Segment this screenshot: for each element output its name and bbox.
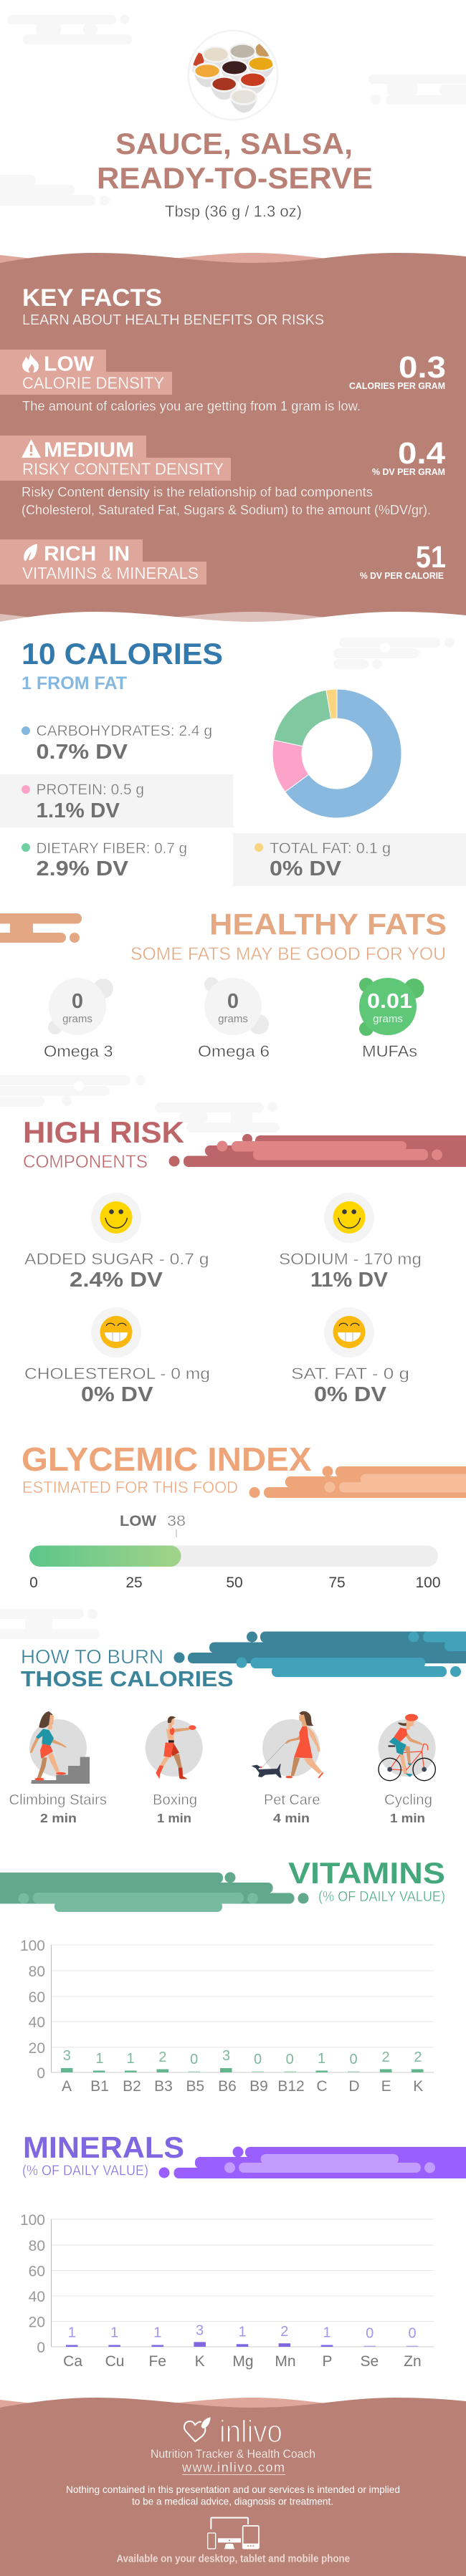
badge: mufas: MUFAs bbox=[362, 1042, 417, 1060]
title: SAUCE, SALSA, bbox=[115, 127, 353, 160]
bar chart: minerals: P bbox=[322, 2353, 333, 2370]
brush accent: orange bbox=[0, 913, 82, 943]
callout: rich in vitamins and minerals: VITAMINS & MINERALS bbox=[22, 564, 199, 582]
brush accent: purple bbox=[159, 2146, 466, 2178]
heading: those calories: THOSE CALORIES bbox=[21, 1666, 234, 1691]
bar chart: vitamins bbox=[20, 1938, 434, 2095]
callout: risky content density: MEDIUM bbox=[44, 438, 134, 461]
donut chart bbox=[272, 689, 401, 818]
brush accent: teal bbox=[173, 1632, 466, 1677]
badge: omega 3 bbox=[44, 978, 113, 1060]
text: risky content description: (Cholesterol, Saturated Fat, Sugars & Sodium) to the amount (%DV/gr). bbox=[22, 503, 431, 517]
panel: footer bbox=[0, 2398, 466, 2576]
callout: rich in vitamins and minerals: RICH IN bbox=[44, 543, 130, 566]
subheading: (% OF DAILY VALUE) bbox=[318, 1889, 445, 1905]
legend: carbohydrates: CARBOHYDRATES: 2.4 g bbox=[36, 723, 212, 739]
heading: how to burn: HOW TO BURN bbox=[21, 1645, 163, 1668]
bar chart: vitamins: 0 bbox=[190, 2052, 198, 2067]
legend: total fat bbox=[233, 833, 466, 886]
duration: 1 min bbox=[157, 1811, 191, 1825]
bar chart: vitamins: B9 bbox=[249, 2078, 268, 2095]
legend: dietary fiber bbox=[22, 840, 187, 880]
bar chart: vitamins: B1 bbox=[90, 2078, 109, 2095]
tagline: Nutrition Tracker & Health Coach bbox=[151, 2447, 315, 2461]
bar chart: minerals: Zn bbox=[404, 2353, 422, 2370]
subheading: ESTIMATED FOR THIS FOOD bbox=[22, 1478, 238, 1496]
bar chart: vitamins: 1 bbox=[95, 2051, 103, 2067]
stat: dv per calorie bbox=[360, 540, 446, 581]
icon: desktop, tablet and phone bbox=[208, 2518, 259, 2549]
bar chart: vitamins: D bbox=[348, 2078, 360, 2095]
item: saturated fat: SAT. FAT - 0 g bbox=[291, 1365, 409, 1383]
bar chart: minerals: 0 bbox=[408, 2325, 417, 2341]
icon: woman climbing stairs bbox=[29, 1711, 90, 1784]
legend: protein: PROTEIN: 0.5 g bbox=[36, 782, 144, 798]
callout: calorie density bbox=[0, 350, 172, 395]
subheading: components: COMPONENTS bbox=[23, 1152, 148, 1172]
bar chart: minerals: 40 bbox=[29, 2289, 45, 2305]
gauge scale: 50 bbox=[226, 1575, 243, 1591]
bar chart: vitamins: K bbox=[413, 2078, 423, 2095]
bar chart: vitamins: 3 bbox=[222, 2048, 230, 2064]
item: cholesterol bbox=[24, 1307, 210, 1406]
callout: calorie density: LOW bbox=[44, 352, 95, 375]
badge: omega 6: Omega 6 bbox=[198, 1042, 270, 1060]
badge: mufas: grams bbox=[373, 1013, 403, 1025]
activity: climbing stairs bbox=[9, 1711, 107, 1825]
bar chart: minerals: 80 bbox=[29, 2238, 45, 2254]
badge: omega 6: 0 bbox=[227, 990, 239, 1013]
label: Pet Care bbox=[264, 1792, 320, 1808]
bar chart: minerals: 1 bbox=[68, 2325, 76, 2341]
stat: dv per calorie: 51 bbox=[416, 540, 446, 575]
item: sodium: SODIUM - 170 mg bbox=[279, 1250, 422, 1268]
bar chart: vitamins: 1 bbox=[318, 2051, 325, 2067]
gauge scale: 100 bbox=[415, 1575, 441, 1591]
legend: protein bbox=[0, 774, 234, 827]
heading: calories: 10 CALORIES bbox=[22, 637, 223, 671]
item: added sugar: ADDED SUGAR - 0.7 g bbox=[24, 1250, 209, 1268]
availability note: Available on your desktop, tablet and mobile phone bbox=[116, 2553, 350, 2565]
item: cholesterol: CHOLESTEROL - 0 mg bbox=[24, 1365, 210, 1383]
badge: omega 3: 0 bbox=[72, 990, 83, 1013]
bar chart: vitamins: B12 bbox=[277, 2078, 305, 2095]
logo: inlivo heart and leaf bbox=[184, 2417, 211, 2441]
disclaimer: Nothing contained in this presentation and our services is intended or implied bbox=[66, 2484, 400, 2495]
panel: healthy fats bbox=[0, 907, 447, 1060]
item: saturated fat bbox=[291, 1307, 409, 1406]
callout: risky content density bbox=[0, 436, 231, 481]
bar chart: vitamins: 0 bbox=[254, 2052, 262, 2067]
icon: woman walking dog bbox=[252, 1711, 323, 1778]
badge: omega 3: Omega 3 bbox=[44, 1042, 113, 1060]
stat: dv per gram: % DV PER GRAM bbox=[372, 466, 445, 477]
item: sodium: 11% DV bbox=[310, 1269, 389, 1292]
heading: vitamins: VITAMINS bbox=[288, 1856, 445, 1890]
subheading: SOME FATS MAY BE GOOD FOR YOU bbox=[130, 944, 446, 964]
item: added sugar bbox=[24, 1193, 209, 1292]
activity: pet care bbox=[252, 1711, 323, 1825]
bar chart: minerals: 2 bbox=[280, 2324, 288, 2340]
bar chart: minerals: 0 bbox=[366, 2325, 374, 2341]
bar chart: vitamins: B3 bbox=[154, 2078, 173, 2095]
heading: minerals: MINERALS bbox=[23, 2130, 184, 2164]
bar chart: minerals: 3 bbox=[196, 2322, 204, 2338]
website link: www.inlivo.com bbox=[181, 2461, 285, 2475]
bar chart: vitamins: 0 bbox=[37, 2065, 45, 2082]
label: Climbing Stairs bbox=[9, 1792, 107, 1808]
label: Boxing bbox=[153, 1792, 197, 1808]
bar chart: vitamins: 20 bbox=[29, 2040, 45, 2057]
panel: burn calories bbox=[9, 1632, 466, 1825]
callout: rich in vitamins and minerals bbox=[0, 539, 206, 585]
title bbox=[97, 127, 373, 195]
heading: high risk: HIGH RISK bbox=[23, 1115, 184, 1149]
bar chart: minerals: 100 bbox=[20, 2212, 45, 2229]
bar chart: vitamins: 60 bbox=[29, 1989, 45, 2006]
bar chart: minerals: Cu bbox=[105, 2353, 124, 2370]
gauge bar bbox=[29, 1546, 438, 1567]
panel: key facts bbox=[0, 253, 466, 626]
item: saturated fat: 0% DV bbox=[314, 1383, 387, 1406]
heading: healthy fats: HEALTHY FATS bbox=[209, 907, 447, 941]
bar chart: vitamins: 100 bbox=[20, 1938, 45, 1954]
icon: woman cycling bbox=[379, 1714, 436, 1781]
icon: flame bbox=[22, 353, 39, 373]
brush accent: red bbox=[169, 1134, 466, 1167]
bar chart: vitamins: 3 bbox=[63, 2048, 71, 2064]
duration: 4 min bbox=[273, 1811, 310, 1825]
text: risky content description bbox=[22, 485, 431, 517]
bar chart: vitamins: B2 bbox=[123, 2078, 141, 2095]
bar chart: minerals: Ca bbox=[63, 2353, 82, 2370]
bar chart: vitamins: 80 bbox=[29, 1964, 45, 1980]
bar chart: minerals: 1 bbox=[110, 2325, 118, 2341]
bar chart: vitamins: 0 bbox=[349, 2052, 358, 2067]
label: Cycling bbox=[384, 1792, 432, 1808]
bar chart: minerals: Mn bbox=[275, 2353, 296, 2370]
gauge label: LOW bbox=[120, 1513, 156, 1529]
gauge scale bbox=[29, 1575, 441, 1591]
icon: warning triangle bbox=[22, 439, 41, 458]
gauge scale: 75 bbox=[328, 1575, 346, 1591]
stat: calories per gram: 0.3 bbox=[399, 350, 446, 385]
bar chart: minerals: K bbox=[195, 2353, 205, 2370]
disclaimer: to be a medical advice, diagnosis or treatment. bbox=[132, 2496, 333, 2507]
subheading: (% OF DAILY VALUE) bbox=[22, 2163, 148, 2179]
stat: dv per gram: 0.4 bbox=[398, 436, 445, 471]
heading: key facts: KEY FACTS bbox=[22, 284, 162, 312]
heading: glycemic index: GLYCEMIC INDEX bbox=[22, 1441, 312, 1478]
gauge scale: 0 bbox=[29, 1575, 38, 1591]
panel: high risk bbox=[23, 1115, 466, 1406]
badge: omega 6: grams bbox=[218, 1013, 248, 1025]
gauge label bbox=[120, 1513, 186, 1537]
bar chart: minerals: Se bbox=[360, 2353, 379, 2370]
duration: 1 min bbox=[390, 1811, 425, 1825]
panel: minerals bbox=[20, 2130, 466, 2370]
gauge scale: 25 bbox=[125, 1575, 143, 1591]
badge: omega 6 bbox=[198, 977, 270, 1060]
bar chart: vitamins: 2 bbox=[158, 2049, 166, 2065]
bar chart: minerals: 1 bbox=[238, 2325, 247, 2340]
stat: dv per gram bbox=[372, 436, 445, 477]
legend: protein: 1.1% DV bbox=[36, 799, 120, 822]
brush accent: orange bbox=[249, 1466, 466, 1498]
item: sodium bbox=[279, 1193, 422, 1292]
bar chart: minerals: 1 bbox=[323, 2325, 331, 2341]
duration: 2 min bbox=[40, 1811, 77, 1825]
icon: bowls of sauces in a circle bbox=[189, 31, 277, 120]
bar chart: minerals: 60 bbox=[29, 2264, 45, 2279]
text: risky content description: Risky Content density is the relationship of bad components bbox=[22, 485, 373, 499]
bar chart: vitamins: C bbox=[316, 2078, 328, 2095]
badge: mufas bbox=[359, 978, 424, 1060]
bar chart: vitamins: B5 bbox=[186, 2078, 204, 2095]
legend: total fat: 0% DV bbox=[270, 857, 342, 880]
icon: leaf bbox=[24, 544, 37, 561]
subheading: LEARN ABOUT HEALTH BENEFITS OR RISKS bbox=[22, 312, 324, 328]
subheading: calories from fat: 1 FROM FAT bbox=[22, 673, 127, 693]
bar chart: minerals bbox=[20, 2212, 434, 2370]
legend: dietary fiber: DIETARY FIBER: 0.7 g bbox=[36, 840, 187, 857]
item: added sugar: 2.4% DV bbox=[70, 1269, 163, 1292]
legend: total fat: TOTAL FAT: 0.1 g bbox=[270, 840, 391, 857]
bar chart: vitamins: A bbox=[62, 2078, 72, 2095]
gauge label: 38 bbox=[167, 1513, 186, 1529]
bar chart: vitamins: 0 bbox=[286, 2052, 294, 2067]
badge: mufas: 0.01 bbox=[367, 990, 412, 1013]
activity: boxing bbox=[146, 1716, 203, 1825]
stat: dv per calorie: % DV PER CALORIE bbox=[360, 570, 444, 581]
bar chart: vitamins: 40 bbox=[29, 2014, 45, 2031]
bar chart: minerals: 1 bbox=[153, 2325, 161, 2341]
brush accent: green bbox=[0, 1873, 308, 1912]
callout: calorie density: CALORIE DENSITY bbox=[22, 374, 164, 393]
panel: glycemic index bbox=[22, 1441, 466, 1591]
bar chart: vitamins: E bbox=[381, 2078, 391, 2095]
text: calorie density description: The amount of calories you are getting from 1 gram is low. bbox=[22, 399, 361, 413]
legend: carbohydrates bbox=[22, 723, 212, 764]
bar chart: minerals: 0 bbox=[37, 2340, 45, 2356]
bar chart: minerals: Fe bbox=[148, 2353, 166, 2370]
bar chart: vitamins: 2 bbox=[381, 2049, 390, 2065]
serving size: Tbsp (36 g / 1.3 oz) bbox=[165, 202, 302, 221]
bar chart: vitamins: 1 bbox=[126, 2051, 135, 2067]
icon: boxer bbox=[146, 1716, 203, 1779]
activity: cycling bbox=[379, 1714, 436, 1825]
callout: risky content density: RISKY CONTENT DENSITY bbox=[22, 460, 224, 479]
bar chart: minerals: Mg bbox=[232, 2353, 254, 2370]
stat: calories per gram: CALORIES PER GRAM bbox=[349, 380, 445, 391]
logo: wordmark: inlivo bbox=[219, 2414, 282, 2449]
stat: calories per gram bbox=[349, 350, 446, 391]
legend: dietary fiber: 2.9% DV bbox=[36, 857, 129, 880]
panel: vitamins bbox=[0, 1856, 445, 2095]
bar chart: vitamins: 2 bbox=[414, 2049, 422, 2065]
item: cholesterol: 0% DV bbox=[81, 1383, 153, 1406]
badge: omega 3: grams bbox=[62, 1013, 92, 1025]
title: READY-TO-SERVE bbox=[97, 161, 373, 195]
bar chart: minerals: 20 bbox=[29, 2314, 45, 2331]
bar chart: vitamins: B6 bbox=[218, 2078, 237, 2095]
disclaimer bbox=[66, 2484, 400, 2507]
legend: carbohydrates: 0.7% DV bbox=[36, 741, 128, 764]
